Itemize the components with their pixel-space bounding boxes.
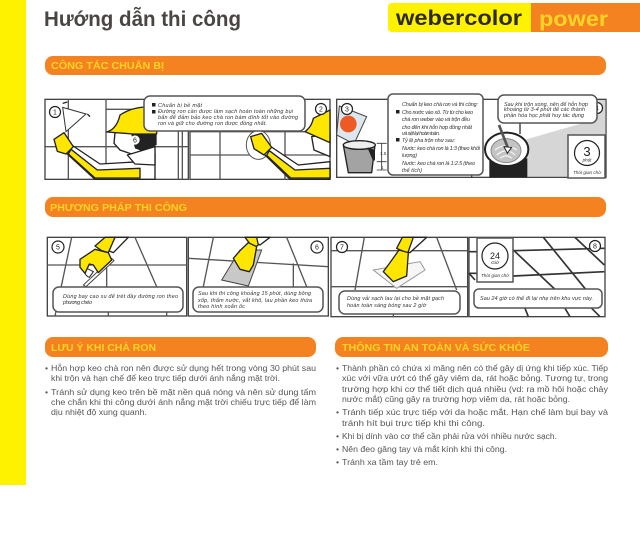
text block: safety and health: • [336,407,339,417]
glove [383,250,408,282]
collar [127,147,155,165]
sleeve and cuff [405,237,427,253]
callout: surface preparation: Chuẩn bị bề mặt [158,102,202,109]
timer: 3 minutes: Thời gian chờ [573,170,602,175]
panel 8: walk after 24 hours [469,237,605,317]
callout: Sau 24 giờ có thể đi lại nhẹ trên khu vực này. [480,295,593,302]
callout: hoàn toàn sáng bóng sau 2 giờ [347,303,427,309]
logo: webercolor power: webercolor [395,7,522,30]
heading bar: application method: PHƯƠNG PHÁP THI CÔNG [50,201,187,214]
text block: safety and health: Khi bị dính vào cơ thể cần phải rửa với nhiều nước sạch. [342,431,557,441]
panel 2: clean joints: 2 [319,106,323,114]
timer: 24 hours [477,238,513,282]
callout: mixing instructions: thể tích) [402,167,422,174]
panel 6: wipe with sponge: 6 [315,244,319,252]
icon: cloth [373,262,425,288]
glove [251,133,272,155]
callout: surface preparation [144,96,305,131]
text block: safety and health: Thành phần có chứa xi măng nên có thể gây dị ứng khi tiếp xúc. Tiếp [342,363,608,373]
text block: safety and health: • [336,363,339,373]
heading bar: safety and health [335,337,608,357]
callout: mixing instructions: Cho nước vào xô. Từ từ cho keo [402,110,473,116]
panel 3: mixing: 1 [381,165,384,170]
logo: webercolor power: power [539,8,608,31]
callout: Sau khi thi công khoảng 15 phút, dùng bông [198,290,311,297]
text block: safety and health: tránh hít bụi trực tiếp khi thi công. [342,418,485,428]
text block: grouting notes: khi trộn và hạn chế để keo trực tiếp dưới ánh nắng mặt trời. [51,373,280,383]
glove [233,243,257,272]
callout: waiting time: phần hóa học phát huy tác dụng [503,113,584,119]
heading bar: safety and health: THÔNG TIN AN TOÀN VÀ SỨC KHỎE [342,341,530,354]
timer: 3 minutes [568,135,605,178]
text block: grouting notes [45,363,316,417]
panel 7: polish tile: 7 [340,244,344,252]
yellow side strip [0,0,26,485]
step number 3 [342,104,352,114]
logo: webercolor power [388,3,640,32]
title: Hướng dẫn thi công [44,7,241,31]
text block: grouting notes: • [45,363,48,373]
callout: mixing instructions: và sệt lại hoàn toàn. [402,131,440,137]
sleeve and cuff [108,237,128,253]
glove [80,249,112,273]
icon: bucket with stirred mix [489,158,527,177]
text block: safety and health: • [336,457,339,467]
glove [54,133,73,154]
heading bar: preparation: CÔNG TÁC CHUẨN BỊ [51,59,164,72]
panel 6: wipe with sponge [188,237,328,316]
step number 4 [592,102,602,114]
heading bar: preparation [45,56,606,75]
step number 2 [316,104,326,114]
panel 1: inspect surface: 1 [53,110,57,116]
panel 8: walk after 24 hours: 8 [593,244,597,250]
panel 3: mixing: 3 [345,106,349,114]
step number 1 [50,106,60,118]
face [312,133,330,157]
callout [339,291,460,314]
panel 2: clean joints [190,99,330,179]
callout: surface preparation: bẩn để đảm bảo keo chà ron bám dính tốt vào đường [158,114,298,121]
callout: mixing instructions: Nước: keo chà ron là 1:3 (theo khối [402,145,481,152]
heading bar: grouting notes [45,337,316,357]
callout: mixing instructions: Tỷ lệ pha trộn như sau: [402,137,456,144]
text block: grouting notes: Hỗn hợp keo chà ron nên được sử dụng hết trong vòng 30 phút sau [51,363,316,373]
callout: mixing instructions: cho đến khi hỗn hợp đồng nhất [402,124,472,131]
text block: safety and health: • [336,444,339,454]
step number 5 [52,241,64,253]
callout: waiting time: Sau khi trộn xong, nên để hỗn hợp [504,101,588,108]
icon: sponge area [222,250,262,286]
callout: phương chéo [62,300,92,306]
callout [53,287,183,312]
panel 3: mixing: 1.5 [380,151,387,156]
icon: trowel [83,258,114,287]
panel 1: inspect surface [45,99,188,179]
text block: grouting notes: Tránh sử dụng keo trên bề mặt nền quá nóng và nên sử dụng tấm [51,387,316,397]
text block: safety and health: nước mắt) cũng gây ra trường hợp viêm da, rát hoặc bỏng. [342,394,570,404]
icon: powder bag [337,106,367,144]
callout: mixing instructions: chà ron weber vào và trộn đều [402,117,470,123]
callout: mixing instructions: Chuẩn bị keo chà ron và thi công: [402,101,478,108]
highlighted joint ellipse [246,131,270,159]
callout: mixing instructions: Nước: keo chà ron là 1:2.5 (theo [402,161,475,167]
timer: 24 hours: 24 [490,251,500,261]
text block: safety and health: Nên đeo găng tay và mắt kính khi thi công. [342,444,507,454]
icon: bucket [343,145,375,173]
callout: surface preparation: Đường ron cần được làm sạch hoàn toàn những bụi [158,109,294,115]
panel 1: inspect surface: 6 [133,138,137,144]
text block: safety and health: Tránh xa tầm tay trẻ em. [342,457,438,467]
callout: Dùng vải sạch lau lại cho bề mặt gạch [347,295,444,302]
arm with sleeve [264,146,330,179]
arm with sleeve [67,145,155,179]
panel 4: resting mixture [472,99,606,178]
step number 7 [336,242,348,252]
icon: magnifier cone [63,107,86,132]
text block: safety and health: trường hợp khi cơ thể tiết dịch quá nhiều (vd: ra mồ hôi hoặc chảy [342,384,609,394]
step number 6 [311,241,323,253]
heading bar: application method [45,197,606,217]
helmet [305,110,330,143]
text block: grouting notes: • [45,387,48,397]
helmet [107,107,157,134]
callout: Dùng bay cao su để trét đầy đường ron theo [63,293,178,300]
head and hair [114,130,153,154]
text block: grouting notes: dịu nhiệt độ xung quanh. [51,407,147,417]
timer: 3 minutes: 3 [583,144,591,159]
text block: safety and health [336,363,609,467]
panel 5: spread grout: 5 [56,244,60,252]
timer: 24 hours: Thời gian chờ [481,273,510,278]
callout: surface preparation: ron và giữ cho đường ron được đồng nhất. [158,120,267,127]
text block: grouting notes: che chắn khi thi công dưới ánh nắng mặt trời chiếu trực tiếp để làm [51,397,316,407]
callout: xốp, thấm nước, vắt khô, lau phần keo thừa [197,297,312,304]
text block: safety and health: xúc với vữa ướt có thể gây viêm da, rát hoặc bỏng. Tương tự, trong [342,373,608,383]
panel 7: polish tile [331,237,468,317]
text block: safety and health: • [336,431,339,441]
timer: 3 minutes: phút [582,158,592,162]
ratio dimension marks [377,143,387,170]
panel 3: mixing [337,99,472,177]
callout: theo hình xoắn ốc [198,303,245,310]
timer: 24 hours: Giờ [491,260,500,266]
text block: safety and health: Tránh tiếp xúc trực tiếp với da hoặc mắt. Hạn chế làm bụi bay và [342,407,608,417]
callout: waiting time [498,95,597,123]
callout: waiting time: khoảng từ 3-4 phút để các thành [504,106,585,113]
step number 8 [590,240,600,252]
panel 4: resting mixture: 4 [595,106,599,112]
panel 5: spread grout [47,237,187,316]
callout [193,287,323,312]
callout: mixing instructions: lượng) [402,153,417,159]
heading bar: grouting notes: LƯU Ý KHI CHÀ RON [51,341,156,354]
callout: mixing instructions [388,94,483,175]
sleeve and cuff [253,237,270,245]
